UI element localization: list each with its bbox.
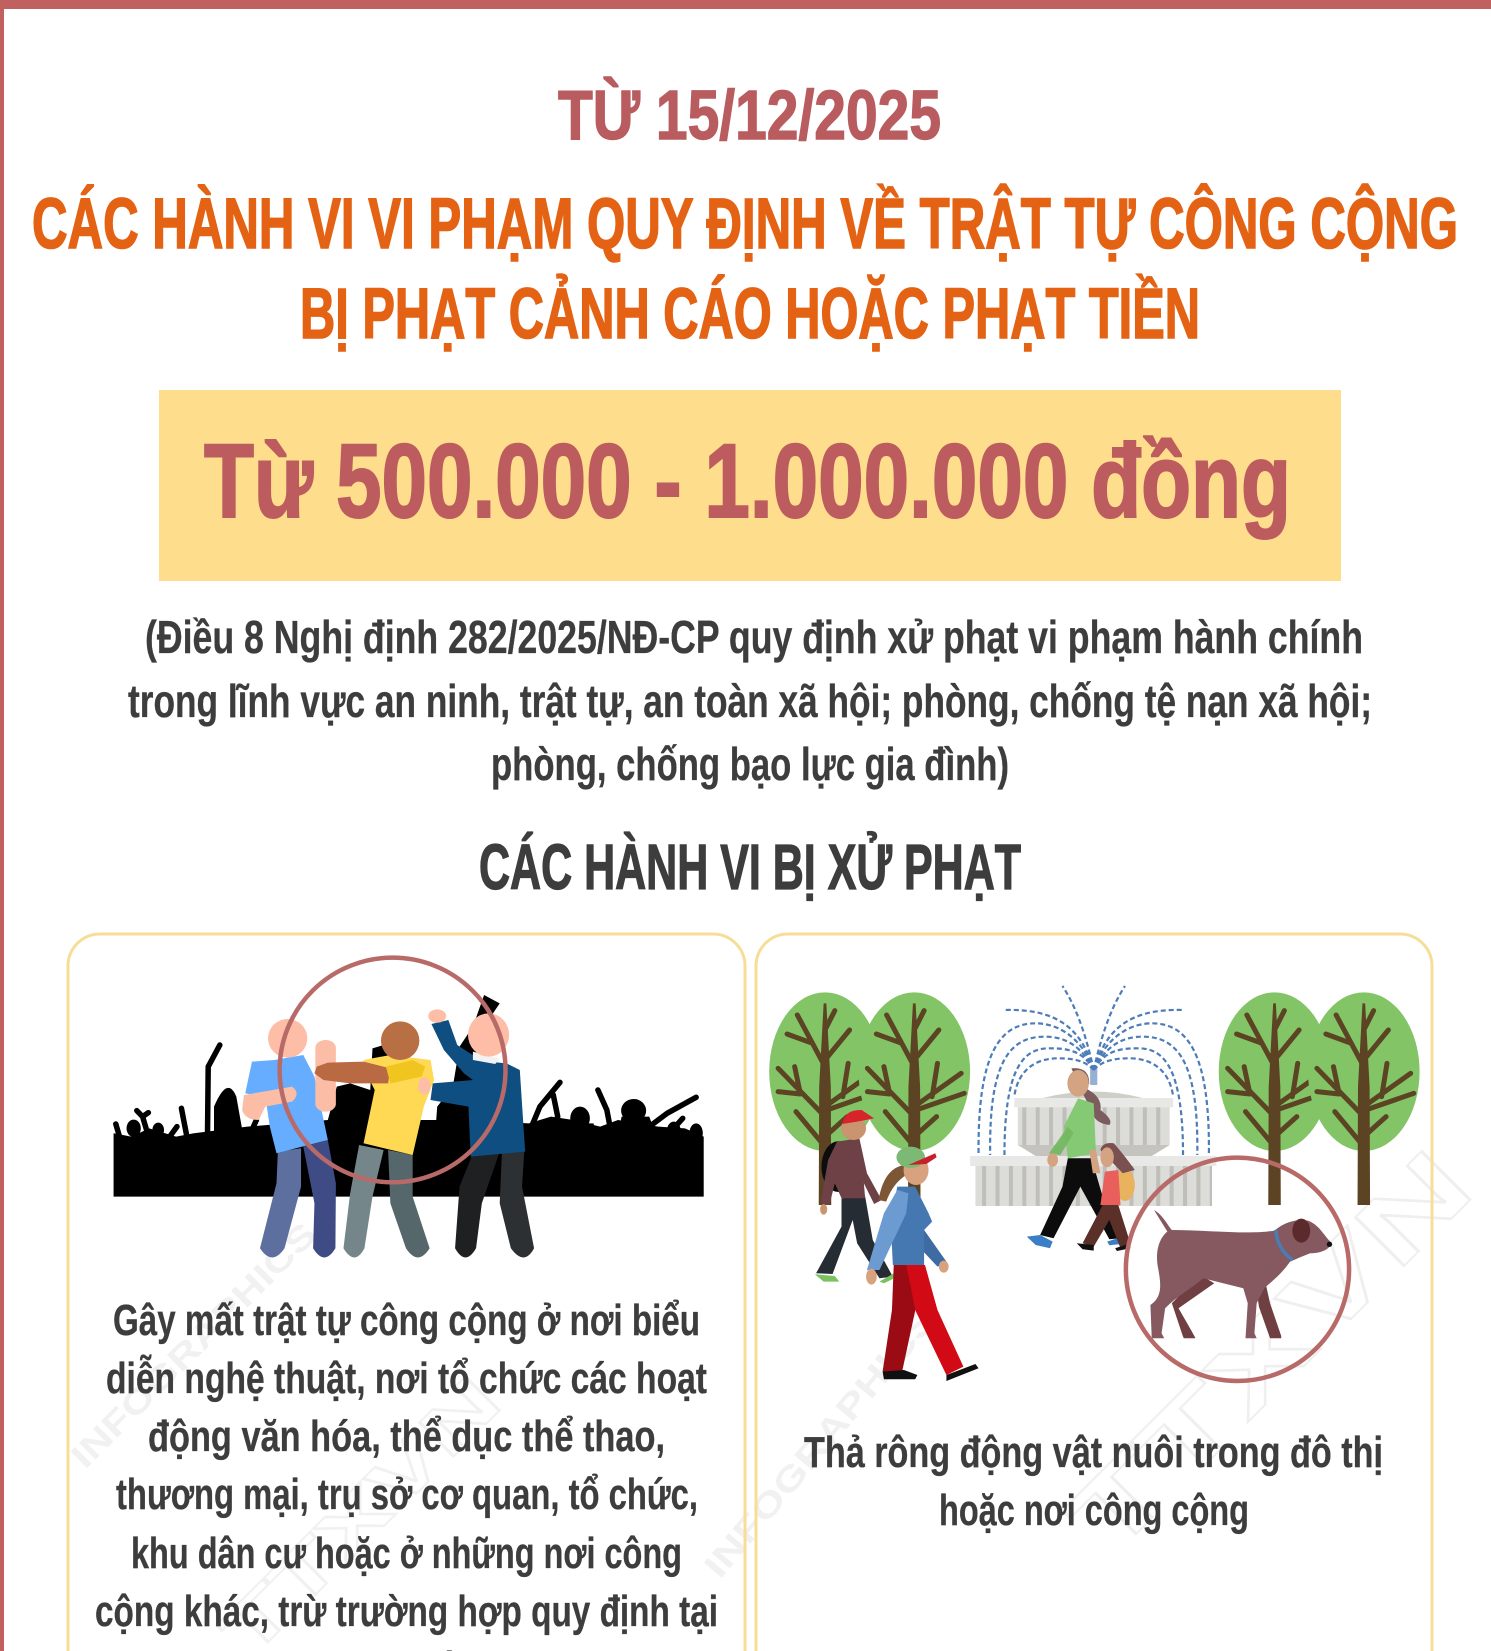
panel: stray animals bbox=[756, 934, 1432, 1651]
crowd silhouette bbox=[114, 995, 704, 1197]
text: disorder description: thương mại, trụ sở cơ quan, tổ chức, bbox=[116, 1470, 698, 1519]
illustration: park scene with dog bbox=[769, 986, 1420, 1381]
highlight ring bbox=[280, 958, 506, 1182]
person: child with backpack bbox=[1077, 1143, 1135, 1251]
legal basis text bbox=[128, 611, 1372, 790]
person: man with backpack bbox=[815, 1110, 896, 1283]
person: blue shirt bbox=[242, 1019, 336, 1257]
text: disorder description bbox=[95, 1296, 718, 1651]
watermark: INFOGRAPHICS bbox=[64, 1215, 324, 1476]
fine amount banner bbox=[159, 390, 1341, 581]
section heading: CÁC HÀNH VI BỊ XỬ PHẠT bbox=[479, 830, 1021, 903]
text: disorder description: Gây mất trật tự công cộng ở nơi biểu bbox=[113, 1296, 700, 1345]
person: woman in blue and red bbox=[866, 1147, 979, 1381]
title: date: TỪ 15/12/2025 bbox=[558, 76, 941, 154]
person: woman in green bbox=[1027, 1068, 1121, 1248]
title: headline bbox=[32, 184, 1458, 354]
trees bbox=[769, 992, 1420, 1205]
illustration: fighting people and crowd bbox=[114, 958, 704, 1257]
watermark: TTXVN bbox=[1046, 1129, 1491, 1576]
legal basis text: phòng, chống bạo lực gia đình) bbox=[491, 738, 1009, 790]
text: disorder description: cộng khác, trừ trường hợp quy định tại bbox=[95, 1587, 718, 1636]
person: blue jacket bbox=[418, 1009, 534, 1257]
text: disorder description: động văn hóa, thể dục thể thao, bbox=[148, 1412, 665, 1461]
text: stray animal description: hoặc nơi công cộng bbox=[939, 1486, 1249, 1535]
watermark bbox=[64, 1129, 1491, 1651]
highlight ring bbox=[1126, 1158, 1349, 1381]
panel: public disorder bbox=[68, 934, 745, 1651]
text: stray animal description bbox=[804, 1428, 1383, 1535]
text: disorder description: diễn nghệ thuật, nơi tổ chức các hoạt bbox=[106, 1353, 707, 1403]
watermark: INFOGRAPHICS bbox=[697, 1300, 945, 1585]
person: yellow shirt bbox=[314, 1021, 434, 1257]
fountain bbox=[970, 986, 1216, 1206]
text: disorder description: khu dân cư hoặc ở những nơi công bbox=[131, 1529, 682, 1578]
icon: dog bbox=[1150, 1210, 1332, 1338]
